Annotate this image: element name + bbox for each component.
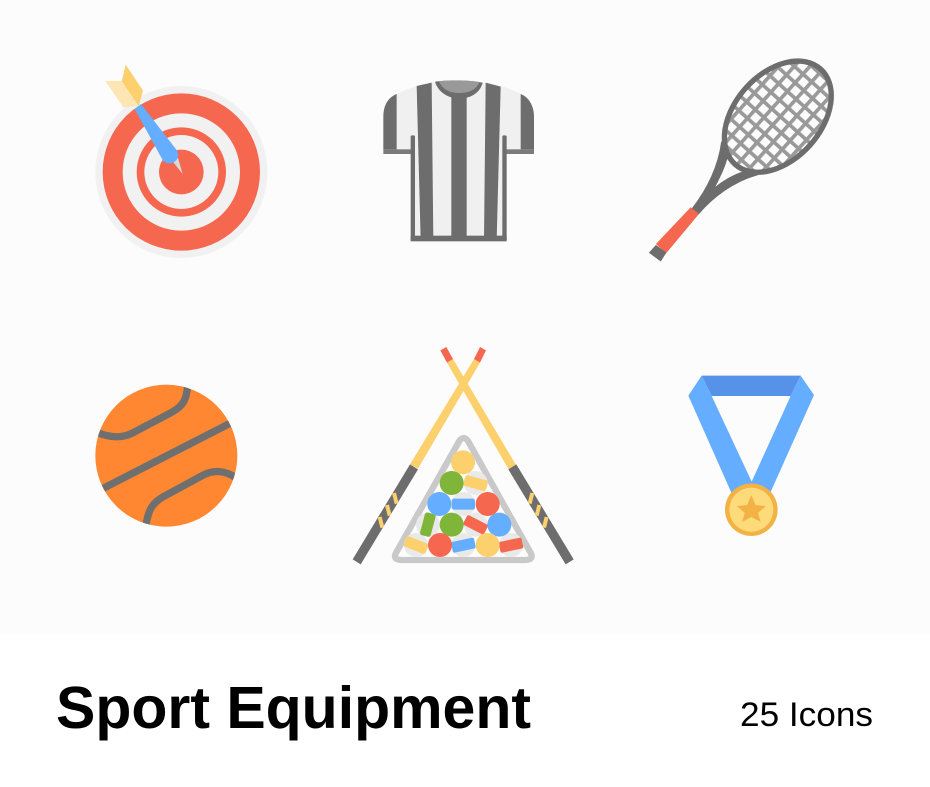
- left cue: [353, 347, 486, 564]
- icon: tennis racket: [649, 40, 853, 261]
- icon count: 25 Icons: [740, 696, 873, 734]
- icon: billiard cues and balls: [353, 347, 574, 564]
- icon: dartboard with dart: [95, 65, 267, 258]
- billiard balls: [403, 450, 524, 557]
- icon: medal with ribbon: [688, 376, 814, 536]
- right cue: [440, 347, 574, 564]
- triangle rack: [395, 438, 532, 560]
- title: Sport Equipment: [56, 675, 531, 741]
- icon: basketball: [95, 385, 237, 527]
- icon: referee shirt: [383, 80, 534, 241]
